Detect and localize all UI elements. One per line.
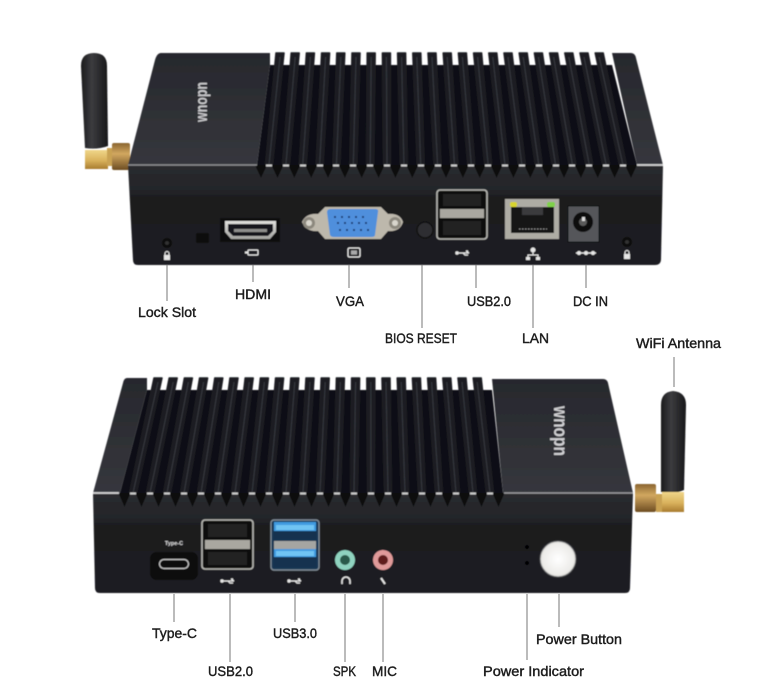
USB 2.0 port, rear: [437, 190, 487, 239]
BIOS reset button: [417, 222, 433, 238]
Type-C port: [150, 541, 198, 580]
small dark square: [196, 233, 209, 243]
device: front view: [93, 378, 686, 593]
heatsink fins: [120, 378, 503, 493]
DC in port: [568, 206, 599, 242]
fin shadows and edge highlights: [128, 165, 663, 178]
label: DC IN: DC IN: [573, 293, 608, 309]
antenna: rear view: [81, 53, 130, 170]
USB 2.0 port, front: [202, 520, 253, 569]
VGA port: [302, 207, 403, 239]
SPK jack: [335, 550, 355, 570]
front panel: [128, 165, 663, 265]
icon: USB rear: [455, 251, 469, 255]
label: MIC: MIC: [372, 663, 397, 679]
icon: DC: [576, 251, 596, 255]
label: BIOS RESET: BIOS RESET: [385, 330, 457, 346]
heatsink fins: [257, 53, 637, 165]
label: USB2.0 front: USB2.0: [208, 663, 253, 679]
power indicator LEDs: [525, 545, 529, 565]
icon: USB front left: [220, 579, 234, 583]
power button: [540, 541, 576, 577]
lock slot right: [622, 237, 632, 259]
label: Lock Slot: Lock Slot: [138, 304, 196, 320]
leader lines: [167, 265, 674, 662]
HDMI port: [220, 218, 280, 242]
label: Power Indicator: Power Indicator: [483, 663, 584, 679]
label: HDMI: HDMI: [235, 286, 271, 302]
brand logo: top: wnopn: [192, 82, 211, 123]
USB 3.0 port: [271, 520, 319, 570]
MIC jack: [373, 550, 393, 570]
icon: USB front right: [287, 579, 301, 583]
label: LAN: LAN: [522, 330, 549, 346]
label: USB2.0 rear: USB2.0: [467, 293, 511, 309]
icon: LAN: [526, 248, 540, 260]
brand logo: top: wnopn: [549, 405, 570, 456]
antenna: front view: [635, 391, 686, 512]
lock slot left: [162, 238, 172, 260]
left flat plate: [93, 378, 147, 493]
fin shadows and edge highlights: [93, 493, 633, 507]
right flat plate: [612, 53, 663, 165]
label: USB3.0: USB3.0: [273, 625, 317, 641]
icon: VGA: [348, 248, 360, 257]
icon: HDMI: [245, 250, 258, 255]
left flat plate: [128, 53, 270, 165]
device: rear view: [81, 53, 663, 265]
label: SPK: SPK: [333, 663, 357, 679]
right flat plate: [492, 379, 633, 493]
front panel: [93, 493, 633, 593]
label: WiFi Antenna: WiFi Antenna: [636, 335, 721, 351]
label: Power Button: Power Button: [536, 631, 622, 647]
icon: headphones: [342, 577, 350, 584]
LAN port: [505, 199, 559, 239]
icon: microphone: [381, 578, 385, 584]
label: Type-C: Type-C: [152, 625, 197, 641]
label: VGA: VGA: [336, 293, 365, 309]
type-C caption: Type-C: [165, 541, 183, 547]
